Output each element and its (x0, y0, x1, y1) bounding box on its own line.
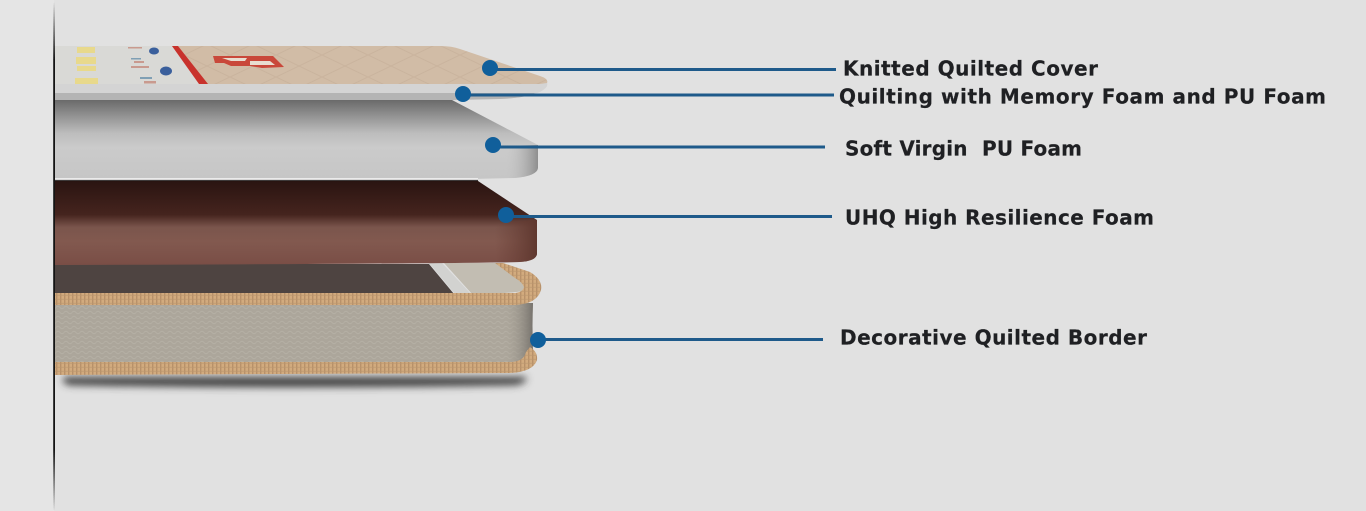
side panel shading (505, 303, 533, 364)
inner knit panel (444, 263, 528, 294)
callout: quilting with memory foam and PU foam (455, 84, 1326, 108)
leader line (493, 146, 825, 148)
marker (455, 86, 471, 102)
leader line (506, 215, 832, 218)
foam top and front (54, 100, 538, 179)
callout: UHQ high resilience foam (498, 206, 1154, 230)
blue mark lower (160, 66, 172, 76)
leader line (490, 68, 836, 71)
label: Knitted Quilted Cover (843, 56, 1098, 80)
callout: soft virgin PU foam (485, 136, 1082, 160)
contact shadow (54, 180, 478, 182)
white inner strip (429, 263, 471, 294)
leader line (463, 94, 834, 96)
red label stripe (172, 46, 208, 84)
marker (485, 137, 501, 153)
label: Decorative Quilted Border (840, 326, 1147, 350)
light lower edge (54, 178, 478, 180)
layer: quilting with memory foam and PU foam (54, 83, 547, 100)
marker (498, 207, 514, 223)
label: UHQ High Resilience Foam (845, 206, 1154, 230)
layer: knitted quilted cover (54, 46, 547, 84)
darker lower strip (54, 93, 535, 100)
marker (530, 332, 546, 348)
foam rounded end (505, 145, 538, 178)
foam top and front (54, 181, 537, 265)
red logo (213, 56, 284, 68)
label: Soft Virgin PU Foam (845, 136, 1082, 160)
marker (482, 60, 498, 76)
leader line (538, 338, 823, 341)
foam rounded end (495, 220, 537, 263)
inner dark surface (54, 264, 454, 294)
printed label area (54, 46, 200, 84)
callout: decorative quilted border (530, 326, 1147, 350)
left margin panel (0, 0, 54, 511)
logo centre (222, 58, 275, 65)
label: Quilting with Memory Foam and PU Foam (839, 84, 1326, 108)
small print marks (128, 47, 156, 84)
top piping (54, 263, 541, 305)
layer: soft virgin PU foam (54, 100, 538, 180)
bottom piping (54, 347, 537, 375)
layer: decorative quilted border (54, 263, 541, 387)
knit side panel (54, 303, 533, 364)
beige cover top (54, 46, 547, 84)
blue marks (149, 48, 159, 54)
grey quilting edge (54, 83, 547, 100)
layer: UHQ high resilience foam (54, 181, 537, 265)
yellow print blocks (75, 47, 98, 84)
callout: knitted quilted cover (482, 56, 1098, 80)
floor shadow (63, 377, 526, 387)
vertical black edge line (53, 2, 55, 511)
